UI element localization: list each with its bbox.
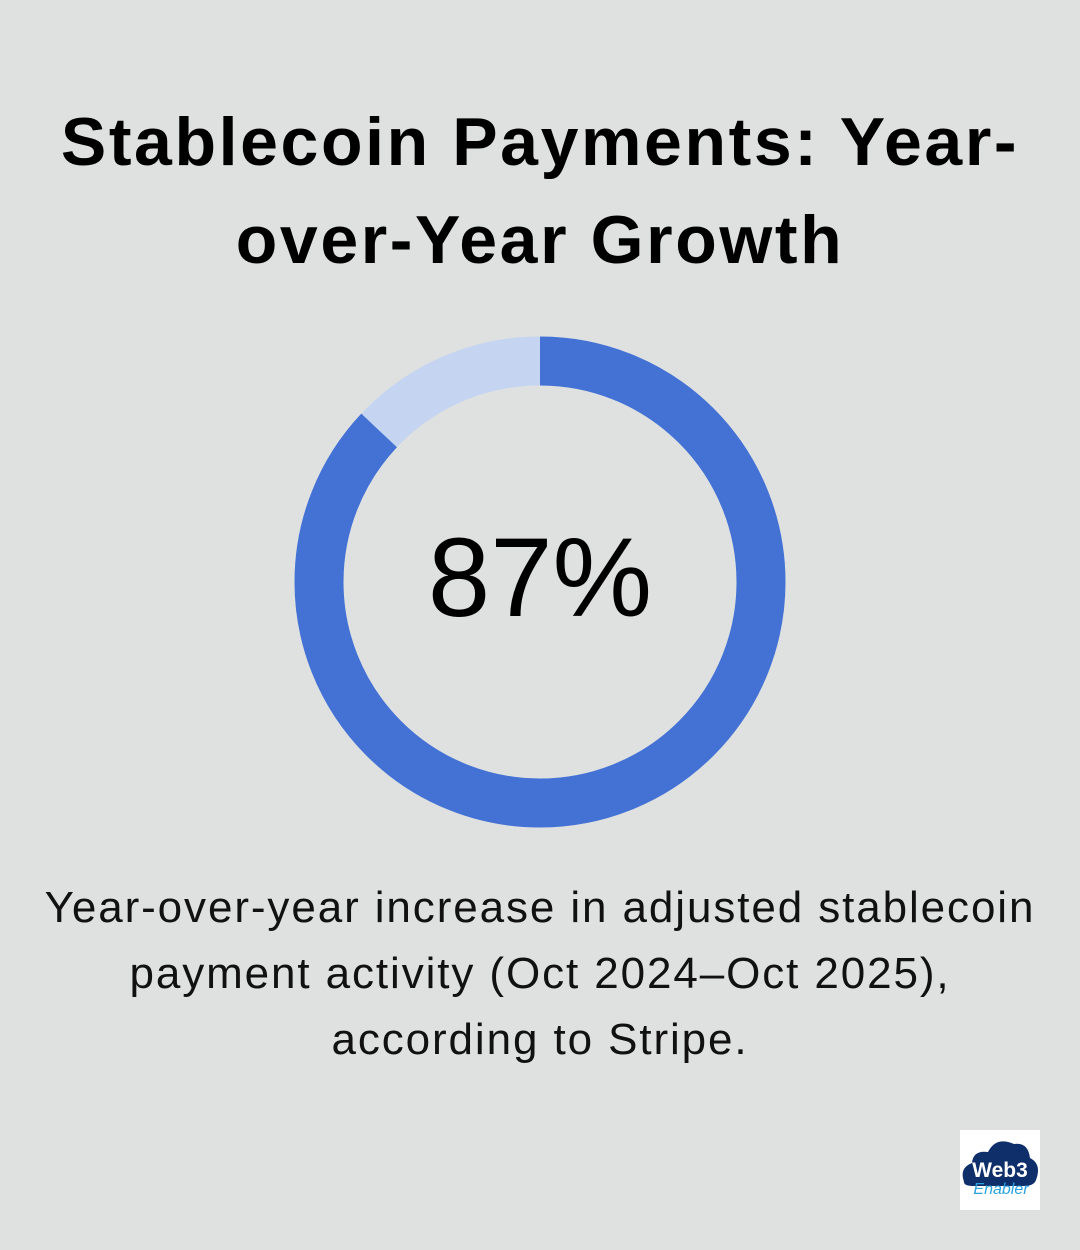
description text: payment activity (Oct 2024–Oct 2025), (129, 949, 951, 998)
donut chart (294, 336, 786, 828)
donut value 87% (319, 361, 761, 803)
description text: Year-over-year increase in adjusted stablecoin (45, 883, 1035, 932)
donut track (remaining 13%) (319, 361, 761, 803)
description text: according to Stripe. (331, 1015, 749, 1064)
logo: Web3 Enabler: Enabler (973, 1181, 1029, 1198)
title: over-Year Growth (236, 202, 844, 278)
center value: 87% (428, 515, 652, 640)
description text (45, 883, 1035, 1064)
logo: Web3 Enabler (960, 1130, 1040, 1210)
title (61, 104, 1019, 278)
logo: Web3 Enabler: Web3 (972, 1159, 1028, 1182)
title: Stablecoin Payments: Year- (61, 104, 1019, 180)
